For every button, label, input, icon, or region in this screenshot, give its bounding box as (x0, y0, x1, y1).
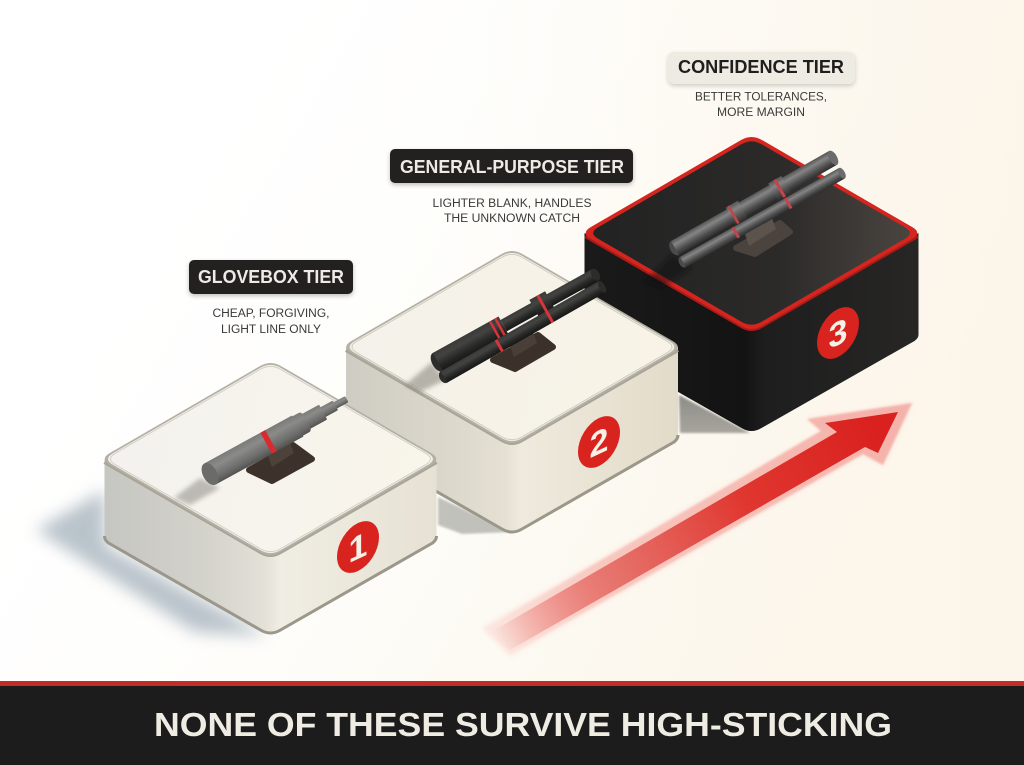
heading: GLOVEBOX TIER (198, 267, 344, 287)
arrow fill (486, 412, 898, 650)
badge 3 (817, 299, 859, 367)
box 1 inner rim (108, 365, 433, 553)
arrow outline (484, 403, 912, 654)
arrow glow (482, 403, 912, 656)
rod end cap (198, 460, 222, 488)
heading: GENERAL-PURPOSE TIER (400, 157, 624, 177)
pill (390, 149, 633, 183)
box 2 body (346, 347, 678, 532)
box 3 body (584, 233, 918, 431)
box 2 bottom lip (346, 435, 678, 532)
badge 2: 2 (590, 419, 608, 466)
dark band (0, 686, 1024, 765)
label: glovebox tier (189, 260, 353, 336)
rod shadow 3 (645, 254, 692, 288)
banner text: NONE OF THESE SURVIVE HIGH-STICKING (154, 706, 892, 743)
label: confidence tier (668, 52, 855, 119)
description: BETTER TOLERANCES, (695, 92, 827, 104)
bottom banner (0, 681, 1024, 765)
box 1 rim lip (104, 462, 436, 555)
upper rod 2 (428, 264, 604, 374)
box 1: glovebox tier (104, 363, 436, 633)
rod tip sections (204, 389, 353, 485)
badge 2 (578, 408, 620, 476)
red stripe (0, 681, 1024, 687)
box 3 red lip (586, 236, 918, 329)
description: CHEAP, FORGIVING, (212, 308, 330, 320)
pill shadow (390, 151, 633, 185)
ground shadows (36, 395, 750, 636)
box 3: confidence tier (584, 137, 918, 431)
box 2 rim lip (346, 350, 678, 443)
badge 3: 3 (829, 310, 847, 357)
rod shadow 1 (174, 478, 220, 505)
badge 1: 1 (349, 524, 367, 571)
lower rod 2 (437, 280, 608, 385)
box 1 top rim (105, 363, 436, 555)
box 2: general-purpose tier (346, 251, 678, 532)
pill (668, 52, 855, 84)
box 1 body (104, 459, 436, 633)
rising arrow (482, 403, 912, 656)
badge 1 (337, 513, 379, 581)
description line 2: MORE MARGIN (717, 107, 805, 119)
rod set 2 on stand (405, 264, 608, 392)
rod shadow 2 (405, 362, 445, 392)
pill shadow (668, 54, 855, 86)
pill shadow (189, 262, 353, 296)
lower rod 3 (677, 167, 847, 269)
box 1 bottom lip (104, 536, 436, 633)
box 1 top surface (111, 366, 430, 552)
rod 1 on stand (174, 389, 353, 505)
stand 3 (736, 218, 790, 254)
label: general-purpose tier (390, 149, 633, 225)
box 3 top rim (586, 137, 917, 329)
rod set 3 on stand (645, 147, 847, 288)
red band on rod 1 (260, 430, 277, 454)
box 2 top surface (352, 254, 672, 440)
stand 1 (249, 443, 312, 481)
description line 2: THE UNKNOWN CATCH (444, 213, 580, 225)
pill (189, 260, 353, 294)
heading: CONFIDENCE TIER (678, 57, 844, 77)
stand 2 (493, 332, 553, 369)
upper rod 3 (666, 147, 842, 259)
box 2 inner rim (350, 253, 674, 441)
box 2 top rim (346, 251, 678, 443)
description line 2: LIGHT LINE ONLY (221, 324, 321, 336)
box 3 top surface (593, 141, 910, 325)
stepped rod 1 (198, 389, 353, 488)
description: LIGHTER BLANK, HANDLES (432, 198, 592, 210)
